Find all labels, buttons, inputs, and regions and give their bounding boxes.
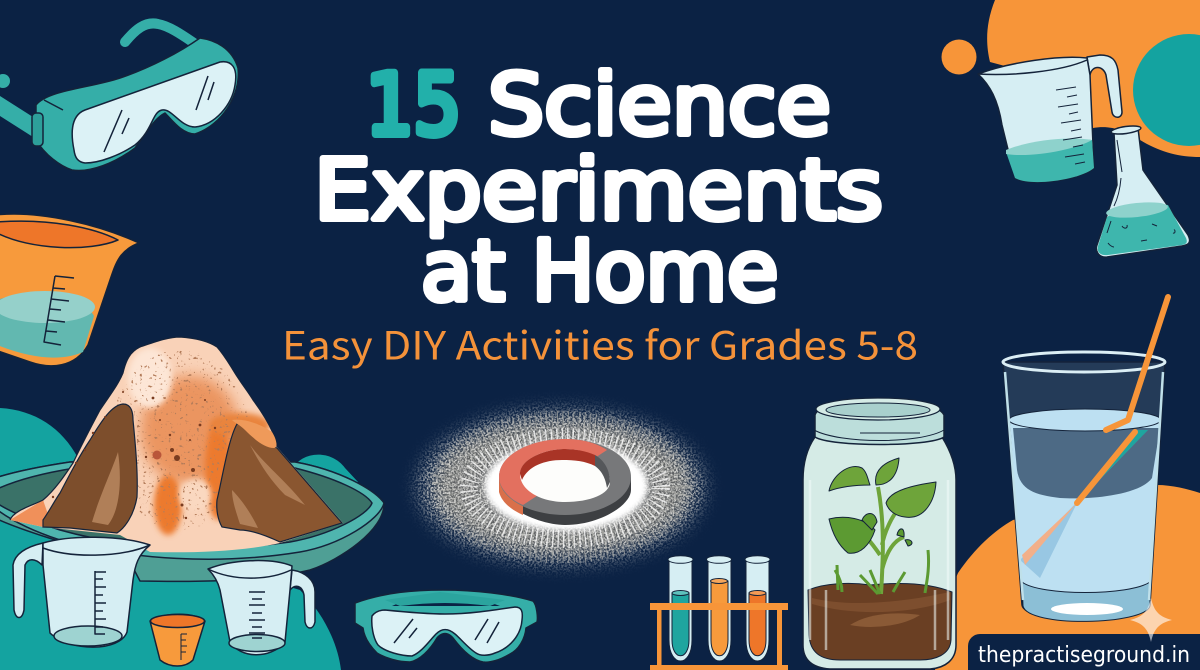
- decorative shapes: top right: [942, 0, 1200, 157]
- volcano orange drip: [232, 420, 276, 448]
- icon: safety goggles top left: [0, 23, 238, 171]
- soil: [808, 583, 952, 660]
- volcano foam bubbles: [52, 391, 216, 519]
- glass side edges: [1005, 372, 1163, 600]
- icon: volcano: [10, 336, 343, 552]
- magnet top face: [499, 439, 631, 515]
- title: Experiments: [314, 141, 883, 239]
- iron filings base: [434, 421, 690, 553]
- icon: sparkle: [1130, 598, 1172, 642]
- icon: glass jar with plant: [803, 398, 956, 669]
- subtitle: Easy DIY Activities for Grades 5-8: [282, 316, 918, 372]
- test tube: dark orange: [745, 556, 770, 661]
- website label: [968, 634, 1200, 670]
- volcano left rock: [43, 404, 137, 533]
- icon: orange beaker: [0, 214, 139, 366]
- title: 15: [366, 56, 461, 154]
- icon: conical flask: [1096, 124, 1190, 257]
- plant leaves: [829, 467, 870, 491]
- volcano right rock: [217, 424, 342, 542]
- test tube: teal: [668, 556, 693, 661]
- volcano rock shading: [92, 445, 305, 528]
- icon: bottom safety goggles: [355, 590, 537, 662]
- iron filings cloud: [419, 411, 703, 563]
- glass bottom: [1022, 582, 1150, 621]
- icon: ring magnet with iron filings: [419, 411, 703, 563]
- title: Science: [488, 56, 831, 154]
- icon: small orange cup: [150, 614, 205, 666]
- rim: [1003, 352, 1165, 372]
- icon: test tube rack: [650, 556, 788, 670]
- icon: left measuring jug: [13, 537, 150, 647]
- straw: [1077, 297, 1168, 503]
- icon: right measuring jug: [208, 561, 315, 655]
- plant stem: [850, 487, 904, 594]
- icon: top right measuring jug: [978, 55, 1122, 182]
- refracted straw: [1020, 428, 1150, 578]
- magnet hole: [520, 449, 610, 502]
- glass empty upper part: [1003, 362, 1165, 620]
- title: at Home: [421, 222, 778, 320]
- icon: glass of water with straw: [1003, 297, 1168, 621]
- title: [314, 56, 883, 320]
- jar glass highlights: [810, 480, 948, 650]
- decorative blob: orange bottom right: [935, 485, 1200, 670]
- icon: teal bowl: [0, 462, 384, 581]
- water: [1010, 420, 1161, 615]
- dark refraction zone: [1013, 428, 1160, 498]
- magnet side: [499, 477, 631, 525]
- white halo: [484, 441, 648, 531]
- decorative blob: teal bottom left: [0, 408, 358, 670]
- test tube: orange: [706, 556, 732, 661]
